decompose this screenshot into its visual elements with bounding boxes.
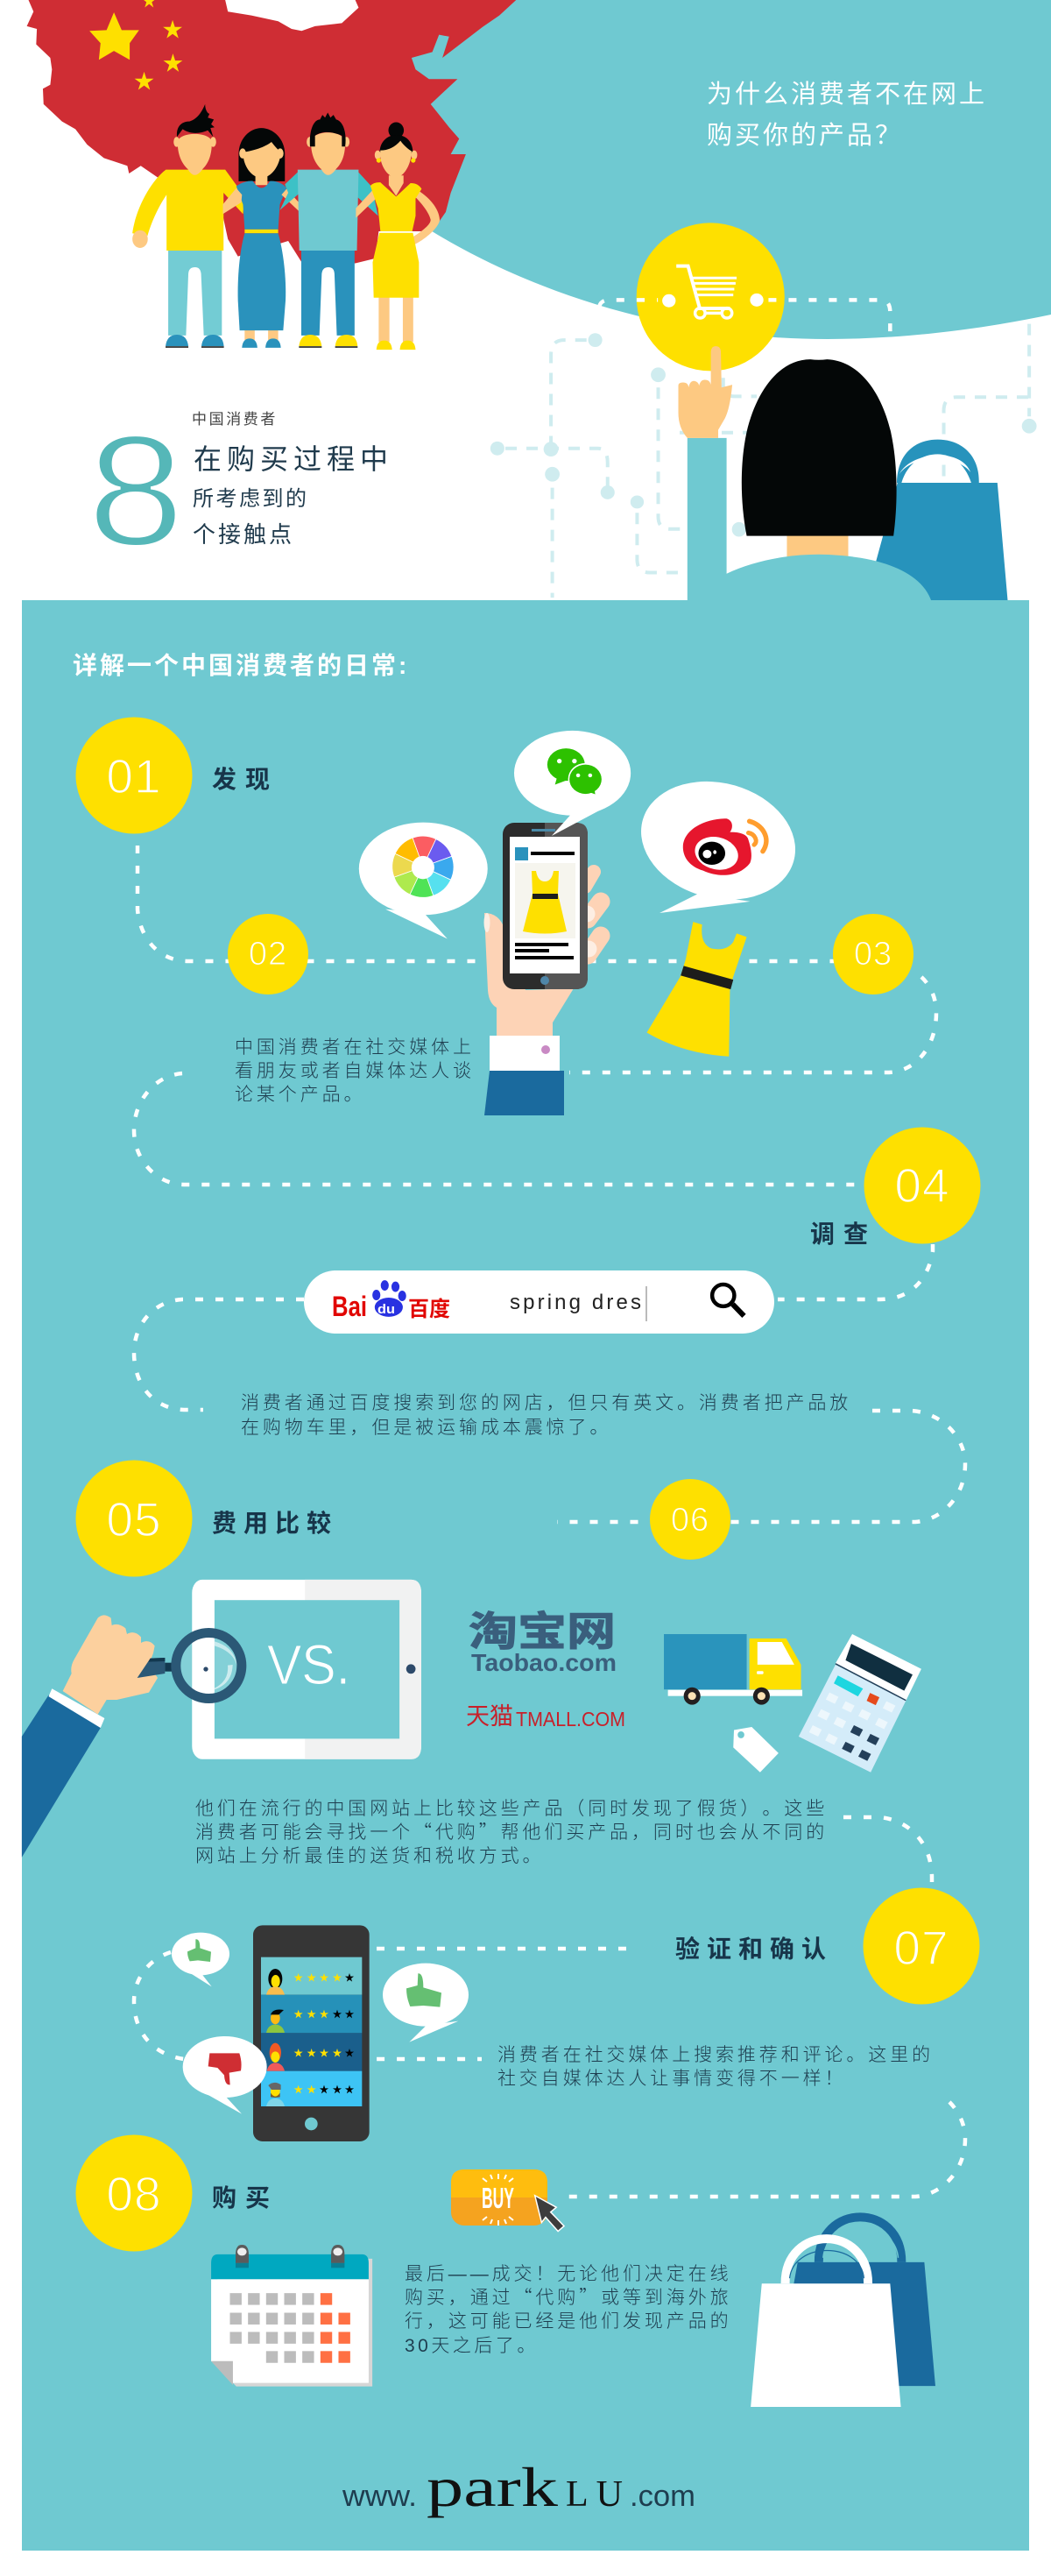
- step 04 description: 消费者通过百度搜索到您的网店，但只有英文。消费者把产品放: [241, 1393, 851, 1413]
- panel: daily journey: [22, 600, 1029, 2551]
- shopping bags: [751, 2217, 935, 2407]
- step 07 label: 验证和确认: [675, 1936, 833, 1963]
- map of China with flag stars: [27, 0, 516, 264]
- step 02-03 description: [235, 1037, 475, 1105]
- step 08 badge: 08: [106, 2167, 162, 2221]
- intro text block: 所考虑到的: [193, 487, 308, 511]
- Tmall logo: TMALL.COM: [516, 1708, 625, 1730]
- search text: spring dres: [510, 1291, 641, 1314]
- sleeve and cuff: [22, 1688, 104, 1858]
- step 05 badge: 05: [106, 1492, 162, 1546]
- step 04 description: [241, 1393, 851, 1438]
- yellow dress: [647, 922, 747, 1057]
- heading: why consumers don't buy online: 购买你的产品？: [707, 121, 903, 150]
- Taobao logo: 淘宝网: [469, 1609, 616, 1654]
- step 03 badge: 03: [854, 936, 892, 973]
- tablet with VS and magnifier: [22, 1580, 421, 1858]
- step 08 description: [405, 2264, 732, 2356]
- step 04 label: 调查: [810, 1221, 877, 1248]
- step 07 description: [497, 2045, 934, 2089]
- Taobao logo: Taobao.com: [471, 1649, 617, 1676]
- step 05 badge: [75, 1460, 193, 1577]
- step 06 badge: [650, 1479, 730, 1560]
- step 05 label: 费用比较: [212, 1510, 338, 1537]
- network of pale dashed lines: [490, 324, 1037, 598]
- bubble: thumbs down: [183, 2036, 267, 2114]
- woman 2: [356, 122, 440, 350]
- step 02 badge: 02: [249, 936, 287, 973]
- step 08 badge: [75, 2134, 193, 2252]
- step 02-03 description: 看朋友或者自媒体达人谈: [235, 1061, 475, 1081]
- calculator: [799, 1634, 921, 1773]
- step 05-06 description: 消费者可能会寻找一个“代购”帮他们买产品，同时也会从不同的: [195, 1818, 828, 1844]
- hand holding phone with dress product: [483, 823, 601, 1115]
- step 04 badge: 04: [894, 1158, 950, 1213]
- star ratings: [294, 1973, 354, 2093]
- step 08 description: 行，这可能已经是他们发现产品的: [405, 2311, 732, 2332]
- Baidu logo: du: [377, 1302, 395, 1317]
- man 1: [132, 104, 244, 348]
- step 02 badge: [228, 914, 308, 994]
- step 08 description: 30天之后了。: [405, 2336, 539, 2356]
- heading: why consumers don't buy online: [707, 80, 987, 150]
- Tmall logo: 天猫: [466, 1703, 513, 1730]
- man 2: [280, 112, 378, 348]
- tablet with VS and magnifier: VS.: [267, 1633, 350, 1696]
- step 08 label: 购买: [212, 2184, 279, 2212]
- illustration: four shoppers: [132, 104, 440, 350]
- step 02-03 description: 中国消费者在社交媒体上: [235, 1037, 475, 1058]
- woman 1: [222, 128, 300, 348]
- bubble: WeChat: [514, 731, 631, 836]
- Baidu logo: 百度: [408, 1298, 450, 1321]
- search bar with Baidu logo: [304, 1270, 774, 1334]
- footer: website: www.: [342, 2480, 417, 2513]
- calendar: [211, 2245, 372, 2387]
- step 07 badge: 07: [893, 1921, 949, 1975]
- step 03 badge: [833, 914, 913, 994]
- step 07 badge: [864, 1887, 979, 2005]
- intro text block: [192, 411, 393, 548]
- delivery truck: [664, 1634, 802, 1705]
- step 08 description: 购买，通过“代购”或等到海外旅: [405, 2283, 732, 2310]
- intro text block: 中国消费者: [192, 411, 278, 428]
- intro text block: 个接触点: [193, 521, 294, 548]
- BUY button with cursor: [451, 2169, 564, 2232]
- bubble: camera app: [359, 823, 488, 939]
- step 01 badge: [75, 717, 193, 834]
- Baidu logo: Bai: [332, 1291, 367, 1322]
- step 07 description: 消费者在社交媒体上搜索推荐和评论。这里的: [497, 2045, 934, 2065]
- step 02-03 description: 论某个产品。: [235, 1085, 365, 1105]
- step 05-06 description: [195, 1799, 828, 1866]
- hand and magnifier: [63, 1615, 242, 1715]
- step 07 description: 社交自媒体达人让事情变得不一样！: [497, 2069, 846, 2089]
- section heading: 详解一个中国消费者的日常:: [73, 652, 409, 679]
- footer: website: LU: [566, 2474, 623, 2515]
- step 04 description: 在购物车里，但是被运输成本震惊了。: [241, 1418, 611, 1438]
- step 08 description: 最后——成交！无论他们决定在线: [405, 2264, 732, 2284]
- step 05-06 description: 网站上分析最佳的送货和税收方式。: [195, 1846, 544, 1866]
- footer: website: park: [427, 2457, 559, 2518]
- footer: website: [342, 2457, 695, 2518]
- bubble: small thumbs up: [172, 1933, 229, 1986]
- BUY button with cursor: BUY: [482, 2182, 514, 2214]
- bubble: large thumbs up: [383, 1964, 469, 2042]
- step 06 badge: 06: [671, 1502, 709, 1539]
- Baidu logo: [332, 1280, 450, 1322]
- step 01 badge: 01: [106, 749, 162, 803]
- step 04 badge: [864, 1127, 981, 1244]
- step 01 label: 发现: [212, 766, 279, 793]
- intro text block: 在购买过程中: [194, 443, 393, 475]
- magnifier icon: [712, 1284, 744, 1316]
- Taobao logo: [469, 1609, 617, 1676]
- background: teal header curve: [390, 0, 1051, 339]
- footer: website: .com: [630, 2480, 695, 2513]
- dashed journey path: [134, 846, 965, 2197]
- reviewer faces: [266, 1969, 285, 2106]
- Tmall logo: [466, 1703, 625, 1730]
- big number 8: 8: [88, 403, 184, 579]
- step 05-06 description: 他们在流行的中国网站上比较这些产品（同时发现了假货）。这些: [195, 1799, 828, 1819]
- price tag: [733, 1727, 779, 1773]
- shopper with bag seen from behind, pointing at cart: [599, 223, 1008, 605]
- heading: why consumers don't buy online: 为什么消费者不在网上: [707, 80, 987, 109]
- bubble: Weibo: [633, 768, 803, 913]
- yellow cart circle with dashed line: [599, 223, 890, 371]
- phone with star reviews: [253, 1925, 370, 2141]
